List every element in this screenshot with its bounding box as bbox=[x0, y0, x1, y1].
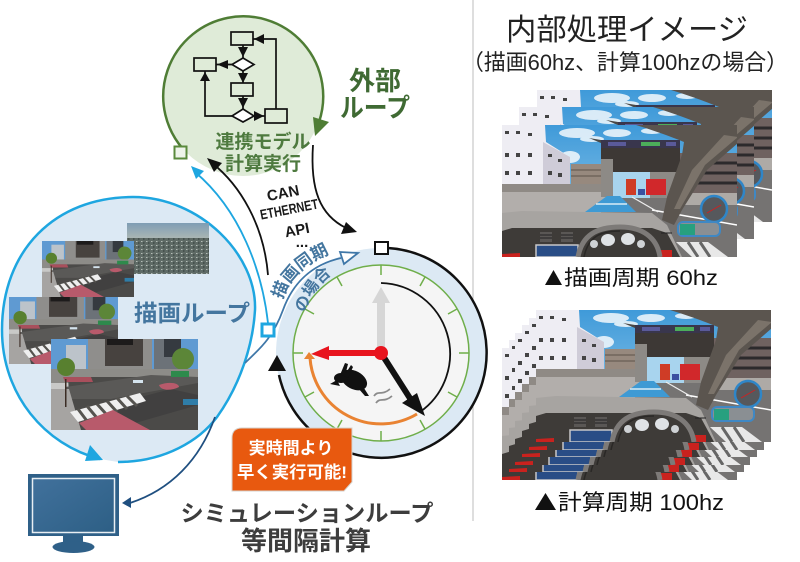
label: connection types: API bbox=[283, 220, 311, 241]
arrow: external to simulation bbox=[312, 145, 357, 234]
external loop arc arrow bbox=[163, 16, 329, 149]
driving frame 3 bbox=[537, 90, 773, 222]
red hand bbox=[311, 346, 388, 360]
label: linked model execution: 計算実行 bbox=[225, 152, 301, 175]
heading: fixed interval calculation: 等間隔計算 bbox=[241, 526, 371, 556]
panel: calculation period 100hz images bbox=[502, 310, 772, 480]
panel: simulation loop clock bbox=[268, 242, 487, 458]
arrow: render to external bbox=[191, 166, 268, 323]
icon: approximately sign bbox=[374, 389, 392, 403]
sync curve bbox=[245, 258, 341, 363]
subtitle: （描画60hz、計算100hzの場合） bbox=[462, 50, 788, 75]
heading: simulation loop: シミュレーションループ bbox=[180, 500, 434, 526]
text: render period: 描画周期 60hz bbox=[564, 267, 718, 290]
icon: black square marker bbox=[375, 242, 388, 254]
label: sync drawing bbox=[244, 242, 360, 364]
driving frame 2 bbox=[529, 318, 765, 450]
render loop circle bbox=[2, 197, 255, 462]
arrow: render to monitor bbox=[122, 417, 215, 508]
heading: render loop: 描画ループ bbox=[134, 300, 250, 326]
icon: hollow arrow bbox=[340, 252, 358, 264]
black hand bbox=[383, 356, 425, 416]
driving frame 4 bbox=[515, 333, 751, 465]
case text: の場合 bbox=[296, 268, 330, 310]
driving frame 1 bbox=[536, 310, 772, 442]
text: calculation period: 計算周期 100hz bbox=[558, 490, 724, 515]
driving frame 3 bbox=[522, 325, 758, 457]
orange arc bbox=[304, 352, 417, 424]
external loop circle bbox=[163, 16, 323, 176]
flowchart icon bbox=[194, 32, 287, 123]
icon: monitor bbox=[28, 474, 119, 553]
title: 内部処理イメージ bbox=[506, 14, 748, 47]
driving frame 2 bbox=[519, 107, 755, 239]
clock ticks bbox=[293, 265, 469, 441]
icon: blue square marker bbox=[262, 324, 274, 336]
sync text: 描画同期 bbox=[270, 242, 328, 300]
label: linked model execution: 連携モデル bbox=[215, 130, 311, 153]
heading: external loop: ループ bbox=[340, 93, 410, 123]
driving frame 5 bbox=[509, 340, 745, 472]
panel: render loop bbox=[2, 197, 255, 462]
callout: faster than real time bbox=[232, 428, 352, 491]
label: connection types bbox=[259, 182, 320, 251]
label: connection types: ... bbox=[296, 234, 308, 251]
panel: external loop bbox=[163, 16, 410, 176]
arrow: to external loop bbox=[207, 158, 268, 275]
icon: triangle bbox=[535, 493, 556, 510]
black elapsed arc bbox=[381, 283, 450, 412]
driving frame 6 bbox=[502, 348, 738, 480]
arrow head: render loop bbox=[85, 445, 103, 461]
clock outer arrow bbox=[268, 248, 487, 458]
street image front bbox=[51, 339, 198, 430]
callout: faster than real time: 早く実行可能! bbox=[237, 462, 347, 482]
driving frame 1 bbox=[502, 125, 738, 257]
callout: faster than real time: 実時間より bbox=[249, 439, 333, 458]
icon: green square marker bbox=[174, 146, 186, 158]
street image back bbox=[42, 241, 134, 297]
divider bbox=[472, 0, 474, 521]
panel: render period 60hz images bbox=[502, 90, 773, 257]
label: connection types: ETHERNET bbox=[259, 196, 320, 223]
icon: triangle bbox=[545, 270, 562, 285]
clock outer disc bbox=[276, 248, 486, 458]
gray hand bbox=[372, 287, 390, 352]
heading: external loop: 外部 bbox=[349, 66, 401, 96]
clock green ring bbox=[293, 265, 469, 441]
label: connection types: CAN bbox=[266, 182, 301, 205]
street image middle bbox=[9, 297, 118, 364]
aerial city image bbox=[127, 223, 209, 274]
label: render period bbox=[545, 267, 718, 290]
icon: rabbit bbox=[330, 363, 371, 396]
label: calculation period bbox=[535, 490, 724, 515]
